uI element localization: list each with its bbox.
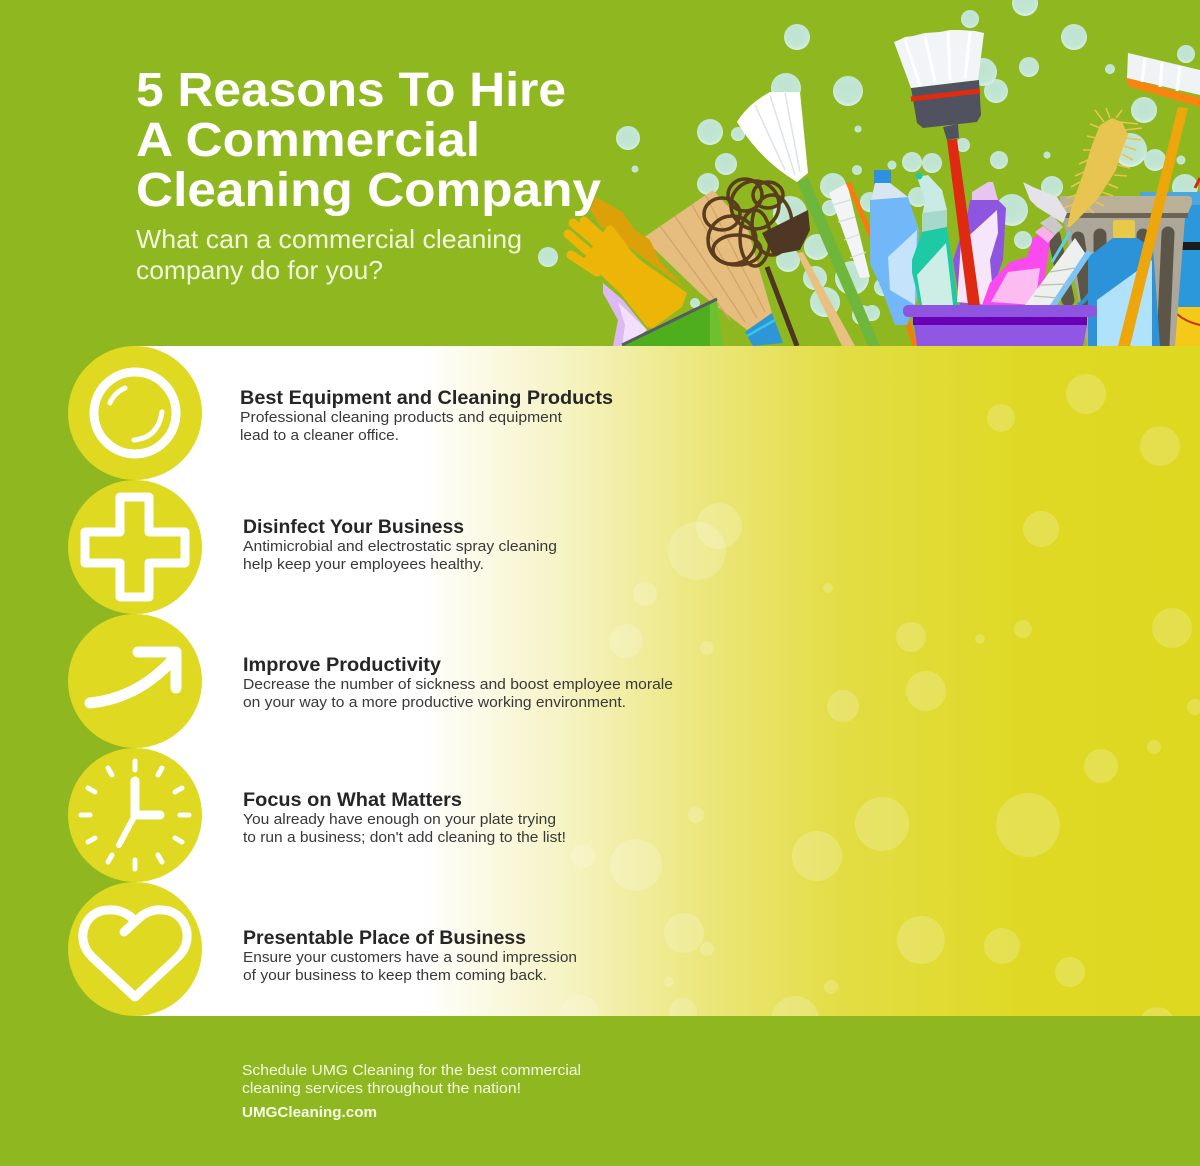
icon: upward arrow	[68, 614, 202, 748]
white mop	[737, 92, 880, 346]
subtitle: What can a commercial cleaning	[136, 224, 522, 254]
reason 5 text	[243, 928, 577, 984]
title	[136, 64, 601, 217]
grey laundry bin	[1054, 196, 1192, 346]
reason 4 text: to run a business; don't add cleaning to the list!	[243, 829, 566, 846]
cleaning supplies illustration	[568, 30, 1200, 347]
white scrub brush	[1025, 232, 1092, 305]
green dustpan	[622, 299, 723, 346]
subtitle	[136, 224, 522, 285]
footer call to action: UMGCleaning.com	[242, 1104, 377, 1121]
blue bucket	[1140, 178, 1200, 347]
red-handled broom	[894, 30, 984, 305]
icon: heart	[68, 882, 202, 1016]
icon: bubble	[68, 346, 202, 480]
footer call to action: Schedule UMG Cleaning for the best commercial	[242, 1062, 581, 1079]
reason 2 text	[243, 517, 557, 573]
reason 1 text	[240, 388, 613, 444]
reason 2 text: Antimicrobial and electrostatic spray cleaning	[243, 538, 557, 555]
feather duster	[1064, 108, 1142, 227]
reason 3 text	[243, 655, 673, 711]
purple bucket	[903, 305, 1097, 346]
plunger	[762, 210, 855, 346]
reason 5 text: Ensure your customers have a sound impression	[243, 949, 577, 966]
reason 5 text: of your business to keep them coming back.	[243, 967, 547, 984]
rubber gloves	[568, 197, 687, 328]
footer call to action: cleaning services throughout the nation!	[242, 1080, 521, 1097]
title: A Commercial	[136, 114, 480, 167]
soap bubbles	[538, 0, 1198, 325]
reason 3 text: on your way to a more productive working environment.	[243, 694, 626, 711]
reason 4 text: You already have enough on your plate trying	[243, 811, 556, 828]
title: Cleaning Company	[136, 164, 601, 217]
light blue bottle	[870, 170, 919, 325]
teal bottle	[912, 172, 958, 305]
reason 2 text: Disinfect Your Business	[243, 517, 464, 538]
orange-handled scrub brush	[829, 182, 915, 346]
icon: medical cross	[68, 480, 202, 614]
reason 2 text: help keep your employees healthy.	[243, 556, 484, 573]
subtitle: company do for you?	[136, 255, 383, 285]
orange broom	[1118, 53, 1200, 346]
rug beater	[704, 179, 797, 346]
purple bottle	[953, 182, 1006, 305]
reason 1 text: Professional cleaning products and equipment	[240, 409, 563, 426]
pink spray bottle	[982, 182, 1067, 305]
blue jug	[1078, 220, 1160, 346]
footer call to action	[242, 1062, 581, 1121]
reason 3 text: Decrease the number of sickness and boost employee morale	[243, 676, 673, 693]
lilac cloth	[603, 283, 647, 346]
main panel with gradient	[135, 346, 1200, 1016]
panel bubbles	[560, 374, 1200, 1044]
straw broom	[643, 190, 783, 346]
reason 1 text: Best Equipment and Cleaning Products	[240, 388, 613, 409]
reason 4 text: Focus on What Matters	[243, 790, 462, 811]
title: 5 Reasons To Hire	[136, 64, 566, 117]
reason 1 text: lead to a cleaner office.	[240, 427, 399, 444]
icon: clock	[68, 748, 202, 882]
reason 5 text: Presentable Place of Business	[243, 928, 526, 949]
reason 4 text	[243, 790, 566, 846]
reason 3 text: Improve Productivity	[243, 655, 441, 676]
